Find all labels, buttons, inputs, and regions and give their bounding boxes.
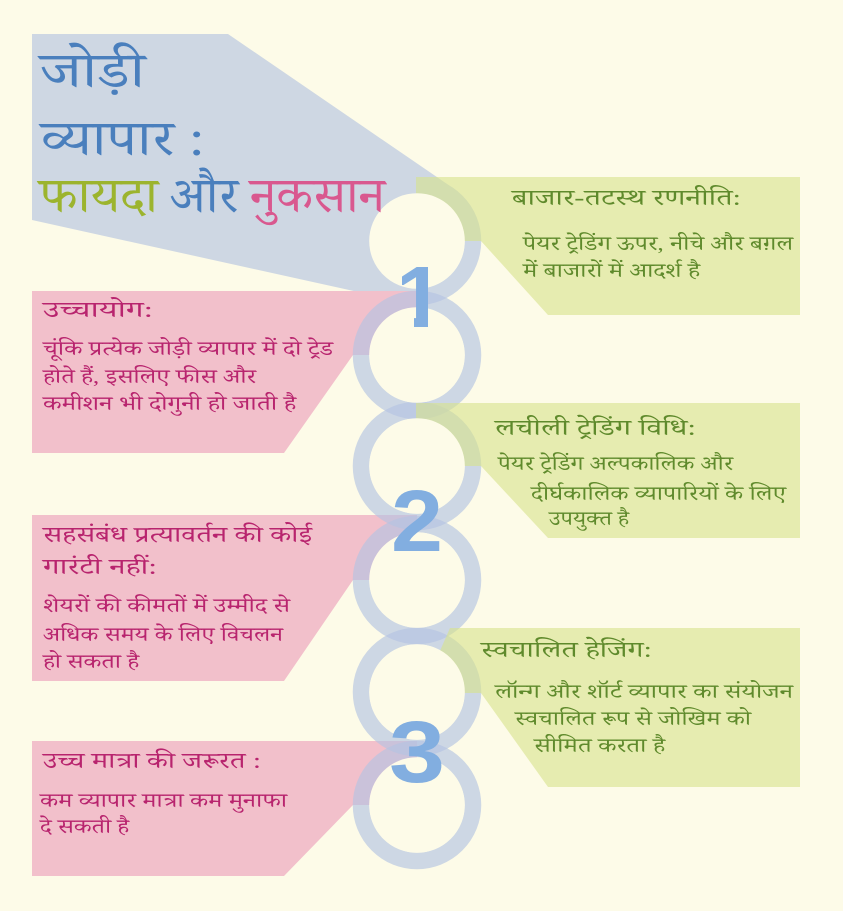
text: high cost: चूंकि प्रत्येक जोड़ी व्यापार में दो ट्रेड <box>42 336 335 361</box>
text: flexible method: पेयर ट्रेडिंग अल्पकालिक और <box>497 451 735 475</box>
text: high volume: उच्च मात्रा की जरूरत : <box>42 748 261 773</box>
title <box>37 42 387 226</box>
text: high cost: होते हैं, इसलिए फीस और <box>42 364 258 388</box>
text: flexible method: लचीली ट्रेडिंग विधि: <box>494 414 696 440</box>
text: market neutral: में बाजारों में आदर्श है <box>522 258 702 282</box>
text: no correlation guarantee: गारंटी नहीं: <box>42 554 157 579</box>
text: no correlation guarantee: अधिक समय के लिए विचलन <box>43 622 285 646</box>
panel: title background <box>32 34 450 305</box>
title: और <box>170 167 240 223</box>
text: no correlation guarantee: सहसंबंध प्रत्यावर्तन की कोई <box>42 522 313 547</box>
text: no correlation guarantee <box>42 522 313 673</box>
text: no correlation guarantee: हो सकता है <box>42 649 141 673</box>
text: high volume <box>39 748 288 838</box>
title: नुकसान <box>248 167 387 226</box>
title: व्यापार : <box>39 110 205 166</box>
number 3: 3 <box>389 704 445 801</box>
panel: high volume <box>32 741 417 876</box>
text: high cost: उच्चायोग: <box>41 297 153 322</box>
ring 1 <box>361 185 473 297</box>
title: जोड़ी <box>37 42 148 98</box>
text: no correlation guarantee: शेयरों की कीमतों में उम्मीद से <box>43 593 291 617</box>
chain of rings <box>361 299 473 861</box>
text: automatic hedging <box>480 636 795 757</box>
text: high volume: दे सकती है <box>39 814 131 838</box>
ring centres <box>369 193 465 853</box>
text: flexible method: दीर्घकालिक व्यापारियों के लिए <box>530 481 788 505</box>
text: automatic hedging: लॉन्ग और शॉर्ट व्यापार का संयोजन <box>494 679 795 703</box>
text: high cost <box>41 297 335 417</box>
number 2: 2 <box>391 473 443 570</box>
panel: automatic hedging <box>436 628 800 787</box>
title: फायदा <box>37 167 161 223</box>
text: high volume: कम व्यापार मात्रा कम मुनाफा <box>39 790 288 814</box>
text: flexible method: उपयुक्त है <box>548 506 631 532</box>
text: flexible method <box>494 414 788 532</box>
text: automatic hedging: स्वचालित हेजिंग: <box>480 636 652 662</box>
text: market neutral: पेयर ट्रेडिंग ऊपर, नीचे और बग़ल <box>522 231 794 255</box>
panel: no correlation guarantee <box>32 515 417 681</box>
panel: market neutral <box>416 177 800 315</box>
text: market neutral: बाजार-तटस्थ रणनीति: <box>511 185 741 210</box>
panel: flexible method <box>416 403 800 538</box>
text: automatic hedging: स्वचालित रूप से जोखिम को <box>514 706 752 730</box>
panel: high cost <box>32 291 417 453</box>
number 1: 1 <box>396 249 444 346</box>
text: high cost: कमीशन भी दोगुनी हो जाती है <box>42 391 298 417</box>
text: automatic hedging: सीमित करता है <box>533 733 667 757</box>
text: market neutral <box>511 185 794 282</box>
